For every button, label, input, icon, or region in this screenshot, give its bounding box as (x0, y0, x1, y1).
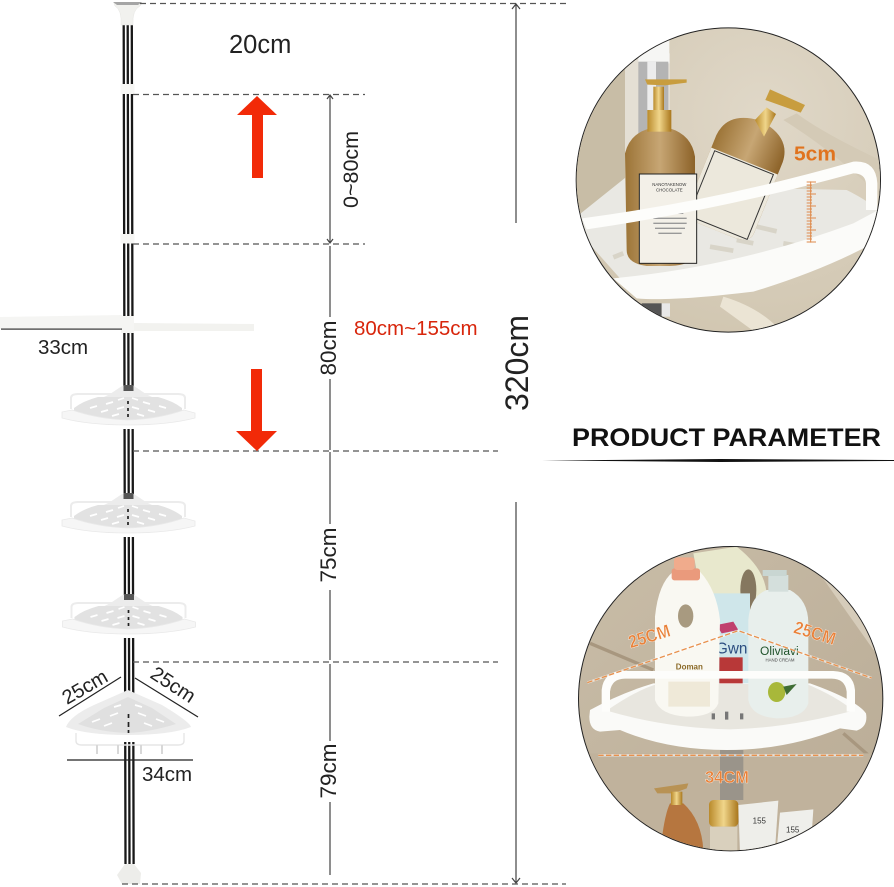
shelf 4 with hooks (66, 690, 191, 754)
shelf 2 (62, 493, 195, 537)
lower pole (720, 750, 743, 800)
hanging towel bar (0, 315, 254, 333)
back bottle (697, 118, 784, 240)
label 80cm to 155cm: 80cm~155cm (354, 317, 478, 340)
label 5cm: 5cm (794, 144, 836, 166)
dimension 0-80cm (327, 95, 363, 243)
pole top cap (114, 3, 142, 25)
dimension 80cm: 80cm (316, 320, 341, 376)
lower joint collar (120, 234, 134, 244)
red arrow down (236, 369, 277, 451)
dimension 79cm: 79cm (316, 743, 341, 798)
heading underline (542, 459, 894, 462)
photo: bottom circle, shelf dimensions: 155 (786, 826, 800, 835)
shelf rail (602, 671, 855, 712)
dashed measure lines (587, 631, 872, 755)
photo: bottom circle, shelf dimensions: Oliviavi (760, 644, 799, 658)
label 20cm: 20cm (229, 31, 291, 59)
photo: bottom circle, shelf dimensions: Gwn (716, 640, 747, 657)
photo: bottom circle, shelf dimensions: HAND CREAM (765, 658, 795, 663)
shelf width 34cm (67, 760, 193, 786)
dashed reference lines (122, 4, 566, 884)
photo: bottom circle, shelf dimensions: 155 (753, 816, 767, 825)
white bottle right (748, 590, 808, 718)
shelf width 34cm: 34cm (142, 763, 192, 786)
lower items (662, 803, 703, 850)
pole top cap detail (113, 2, 142, 5)
pole bottom foot (117, 864, 141, 884)
label 33cm: 33cm (38, 336, 88, 359)
photo: top circle, rail height 5cm: NANOTAKENOW (652, 182, 687, 187)
shelf 1 (62, 385, 195, 429)
shelf 3 (62, 594, 196, 638)
rail (582, 162, 877, 229)
shelf tray (589, 683, 866, 750)
dimension 320cm: 320cm (499, 315, 535, 411)
photo: bottom circle, shelf dimensions: Doman (676, 662, 703, 671)
dimension 320cm (499, 4, 535, 883)
pole (114, 3, 142, 864)
front bottle (625, 128, 695, 266)
shelf width 25cm right (135, 663, 199, 717)
photo: top circle, rail height 5cm: CHOCOLATE (656, 187, 683, 192)
red arrow up (237, 96, 277, 178)
photo: top circle, rail height 5cm (570, 20, 890, 340)
back bottle pump head (765, 89, 805, 113)
shelf width 25cm left: 25cm (58, 666, 112, 709)
white bottle left (655, 572, 720, 717)
shelf width 25cm right: 25cm (146, 663, 199, 708)
dimension 0-80cm: 0~80cm (339, 131, 363, 208)
heading: PRODUCT PARAMETER (572, 424, 881, 452)
label 34CM: 34CM (705, 767, 749, 787)
label 25CM left: 25CM (626, 621, 673, 652)
label 25CM right: 25CM (791, 617, 838, 649)
tray (577, 177, 878, 278)
jug behind (693, 547, 766, 598)
photo: bottom circle, shelf dimensions (570, 540, 893, 860)
ruler (807, 181, 816, 243)
front rim of tray (613, 210, 885, 299)
blue label bottle (714, 593, 750, 684)
upper joint collar (120, 84, 134, 94)
dimension 75cm: 75cm (316, 527, 341, 582)
